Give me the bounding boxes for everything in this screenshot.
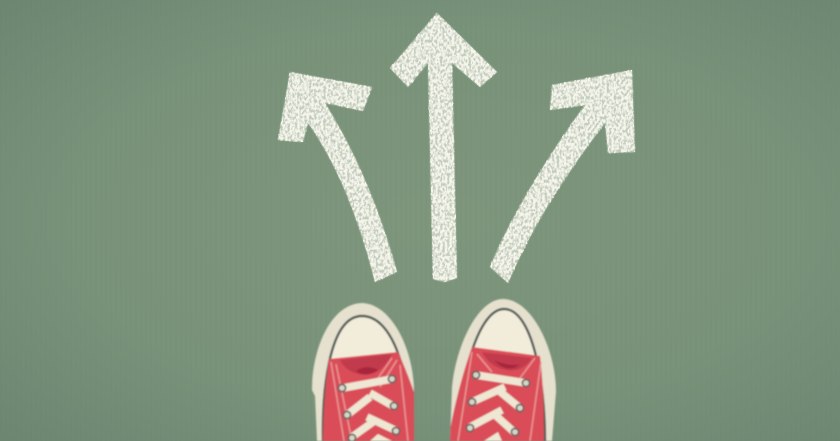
icon: center chalk arrow <box>390 13 497 282</box>
sneaker eyelets <box>338 375 400 441</box>
sneaker red upper <box>448 347 544 441</box>
sneaker stitching <box>331 358 408 441</box>
sneaker stitching <box>458 352 541 441</box>
sneaker sole <box>312 303 414 441</box>
sneaker tongue shadow <box>340 354 392 375</box>
sneaker laces <box>343 379 397 437</box>
sneaker red upper <box>323 352 414 441</box>
icon: right chalk arrow <box>490 70 635 283</box>
sneaker eyelets <box>466 371 530 436</box>
sneaker tongue shadow <box>482 352 532 370</box>
icon: right red sneaker <box>448 299 556 441</box>
icon: left red sneaker <box>312 303 414 441</box>
sneaker laces <box>470 375 526 433</box>
sneaker sole <box>450 299 556 441</box>
sneaker toe cap <box>472 306 548 441</box>
sneaker toe cap <box>323 316 412 441</box>
icon: left chalk arrow <box>278 72 397 282</box>
